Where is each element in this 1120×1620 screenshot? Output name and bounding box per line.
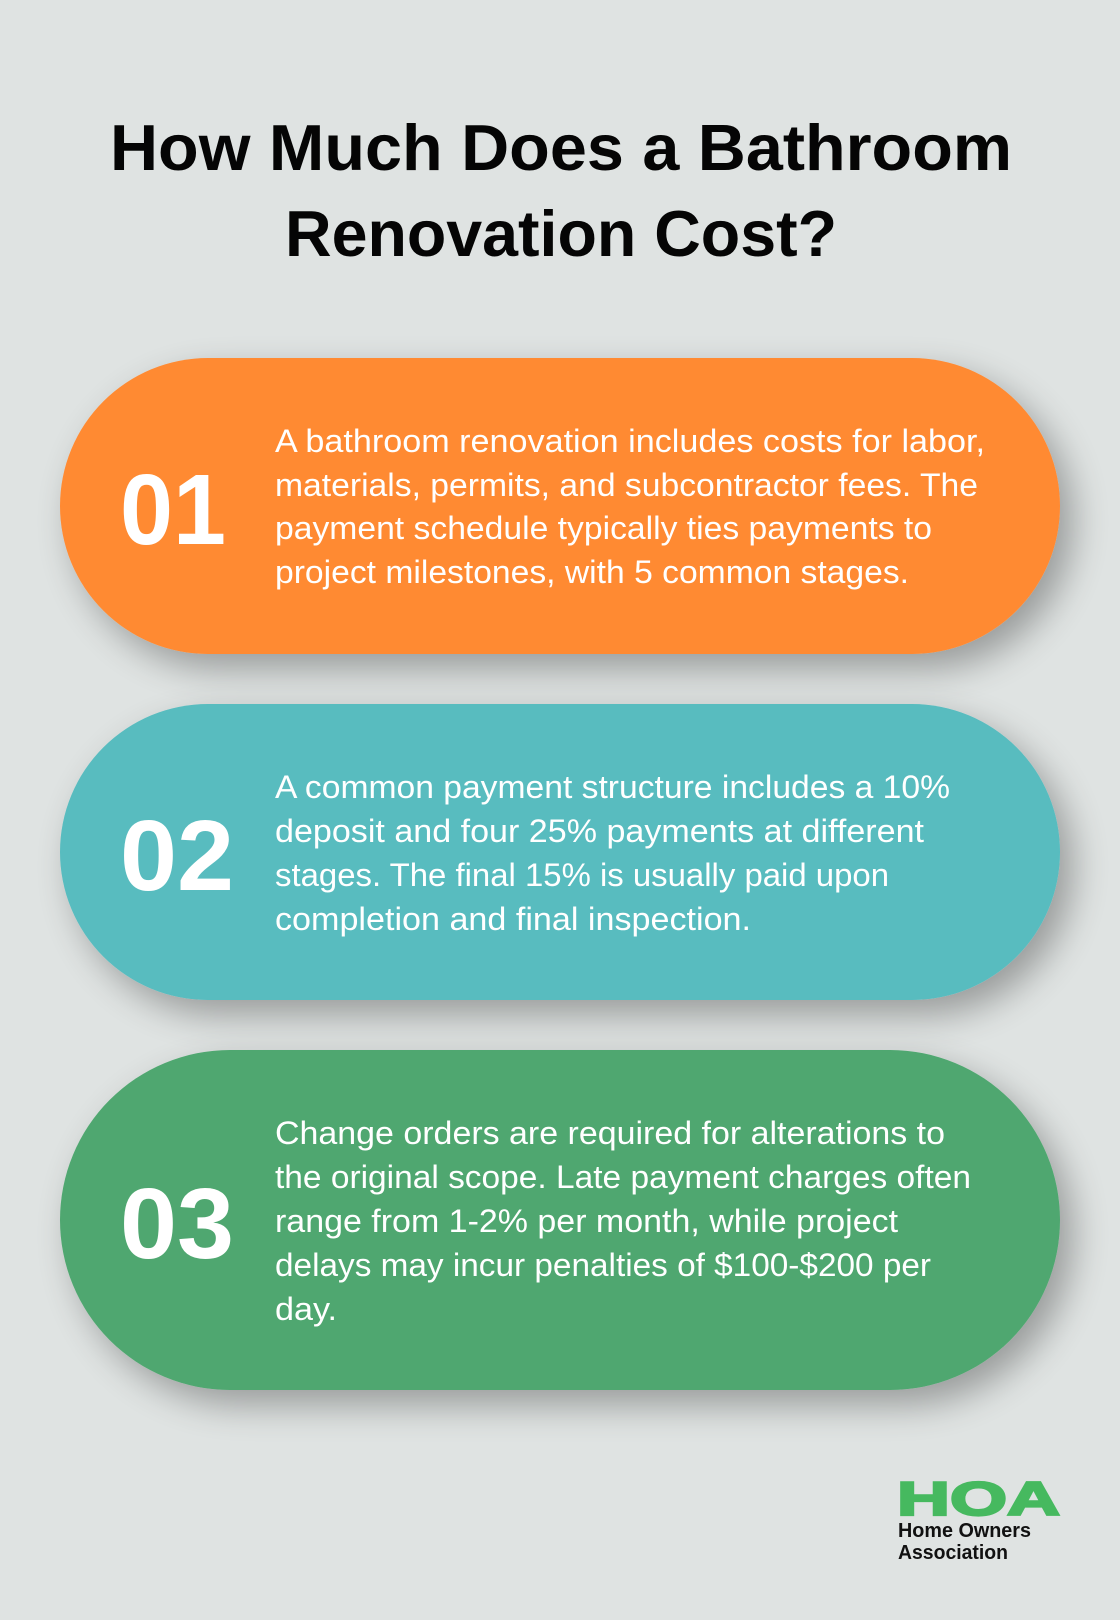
text block: step 01: payment schedule typically ties payments to	[275, 510, 932, 546]
logo: Home Owners Association: Home Owners	[898, 1520, 1031, 1542]
text block: step 02: deposit and four 25% payments at different	[275, 813, 924, 849]
text block: step 01: A bathroom renovation includes costs for labor,	[275, 423, 985, 459]
text block: step 01: project milestones, with 5 common stages.	[275, 554, 909, 590]
logo: Home Owners Association: HOA	[897, 1472, 1060, 1525]
title: Renovation Cost?	[285, 197, 837, 270]
text block: step 02: stages. The final 15% is usually paid upon	[275, 857, 889, 893]
orange pill	[60, 358, 1060, 654]
text block: step 03	[275, 1115, 971, 1327]
title	[110, 111, 1012, 270]
number 01: 01	[120, 454, 226, 566]
panel: step 03	[60, 1050, 1060, 1390]
text block: step 02	[275, 769, 950, 937]
logo: Home Owners Association: Association	[898, 1542, 1008, 1564]
number 02: 02	[120, 800, 234, 912]
logo: Home Owners Association	[897, 1472, 1060, 1564]
text block: step 02: A common payment structure includes a 10%	[275, 769, 950, 805]
panel: step 02	[60, 704, 1060, 1000]
panel: step 01	[60, 358, 1060, 654]
text block: step 02: completion and final inspection.	[275, 901, 751, 937]
text block: step 03: Change orders are required for alterations to	[275, 1115, 945, 1151]
text block: step 01	[275, 423, 985, 590]
text block: step 01: materials, permits, and subcontractor fees. The	[275, 467, 978, 503]
text block: step 03: range from 1-2% per month, while project	[275, 1203, 898, 1239]
title: How Much Does a Bathroom	[110, 111, 1012, 184]
teal pill	[60, 704, 1060, 1000]
text block: step 03: day.	[275, 1291, 337, 1327]
text block: step 03: the original scope. Late payment charges often	[275, 1159, 971, 1195]
number 03: 03	[120, 1168, 234, 1280]
green pill	[60, 1050, 1060, 1390]
text block: step 03: delays may incur penalties of $100-$200 per	[275, 1247, 931, 1283]
